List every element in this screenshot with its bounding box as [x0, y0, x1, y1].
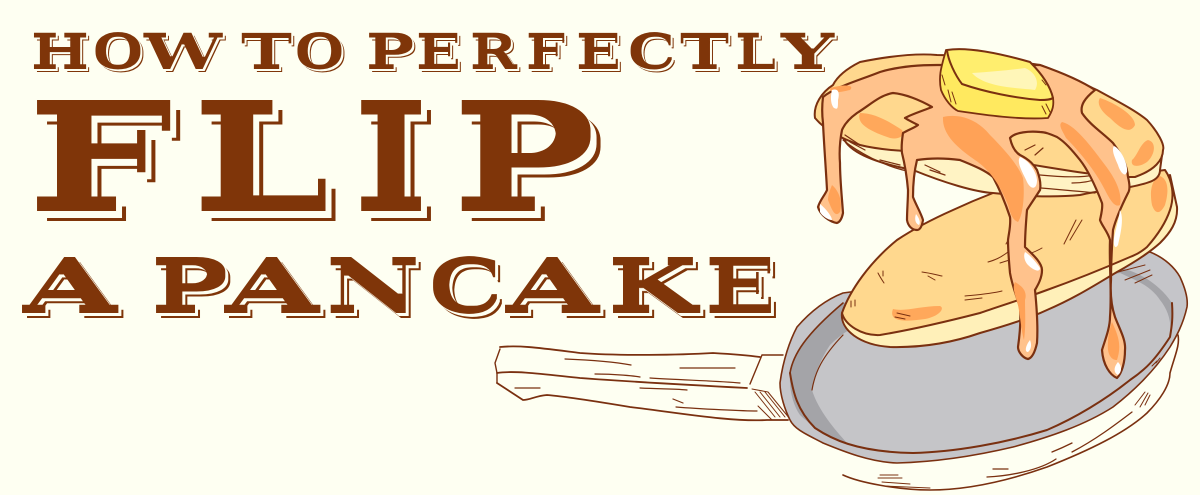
pan rim [780, 252, 1187, 463]
illustration: frying pan [495, 252, 1187, 490]
heading line: how to perfectly: F [525, 25, 566, 80]
lower pancake top [842, 170, 1172, 335]
syrup white highlights [820, 89, 1127, 375]
top pancake browned spots [859, 98, 1154, 166]
heading line: how to perfectly: Y [778, 25, 836, 80]
pan handle [495, 346, 790, 420]
heading line: how to perfectly: O [294, 25, 345, 80]
heading line: how to perfectly: C [627, 25, 676, 80]
heading line: a pancake: N [324, 244, 422, 328]
dark syrup streaks [828, 86, 1120, 360]
heading line: flip: F [24, 73, 176, 242]
heading line: how to perfectly: T [679, 25, 730, 80]
heading line: a pancake: A [502, 244, 603, 328]
title [19, 25, 836, 328]
lower pancake browned spots [892, 176, 1167, 321]
heading line: a pancake: E [703, 244, 778, 328]
butter highlight [972, 68, 1037, 90]
heading line: how to perfectly: E [415, 25, 462, 80]
heading line: flip [24, 73, 598, 242]
heading line: a pancake: P [149, 244, 230, 328]
heading line: a pancake: K [606, 244, 702, 328]
heading line: flip: P [450, 73, 598, 242]
lower pancake side [842, 175, 1177, 347]
syrup pour [818, 65, 1130, 378]
butter top [947, 49, 1053, 100]
heading line: how to perfectly: E [575, 25, 622, 80]
heading line: how to perfectly: T [240, 25, 293, 80]
illustration: butter [940, 49, 1053, 118]
heading line: a pancake [19, 244, 778, 328]
heading line: a pancake: A [221, 244, 323, 328]
butter front [940, 50, 1053, 118]
pan inner wall [790, 268, 1172, 453]
heading line: how to perfectly: W [141, 25, 225, 80]
illustration: lower pancake [842, 170, 1177, 347]
heading line: how to perfectly: O [92, 25, 144, 80]
pan floor [812, 273, 1171, 453]
heading line: how to perfectly: H [30, 25, 90, 80]
pan outer wall [813, 335, 1178, 490]
heading line: a pancake: A [19, 244, 121, 328]
heading line: flip: I [350, 73, 432, 242]
heading line: how to perfectly: P [365, 25, 415, 80]
heading line: flip: L [189, 73, 333, 242]
heading line: how to perfectly [30, 25, 836, 80]
top pancake side [843, 120, 1163, 196]
illustration: top pancake [815, 54, 1163, 196]
heading line: how to perfectly: L [734, 25, 777, 80]
heading line: a pancake: C [427, 244, 504, 328]
illustration: syrup [818, 65, 1130, 378]
top pancake upper face [815, 54, 1163, 177]
heading line: how to perfectly: R [469, 25, 519, 80]
